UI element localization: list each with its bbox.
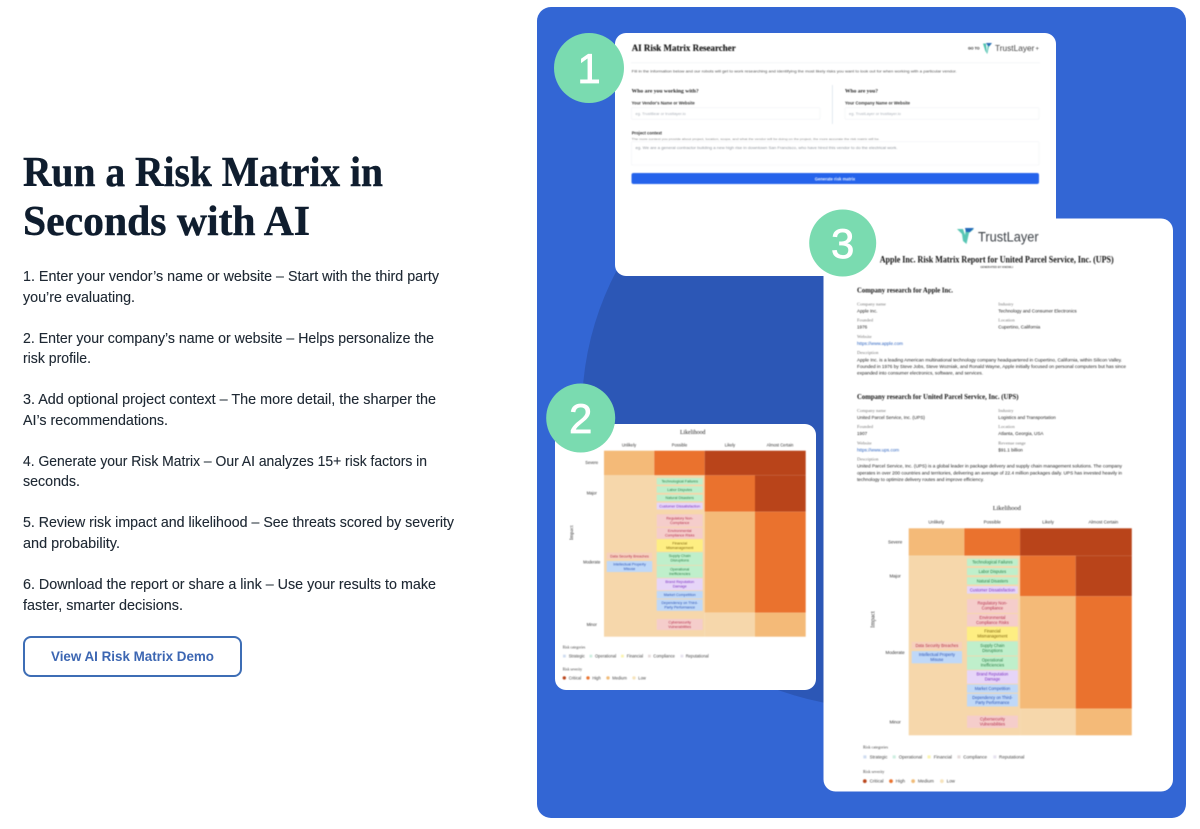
risk matrix small: Natural Disasters (666, 496, 694, 500)
risk matrix small: Major (587, 491, 597, 496)
risk matrix small: Severe (585, 460, 599, 465)
risk matrix large: Brand Reputation (977, 672, 1009, 677)
risk matrix small: Cybersecurity (668, 621, 691, 625)
company research: Apple: Website (857, 334, 872, 339)
risk matrix large: Impact (870, 611, 876, 628)
risk matrix small: Risk severity (563, 668, 582, 672)
risk matrix large: Medium (918, 779, 934, 784)
risk matrix large: Possible (984, 519, 1001, 524)
risk matrix large: Cybersecurity (980, 717, 1006, 722)
risk matrix small: Critical (569, 675, 581, 680)
company research: Apple (857, 287, 1127, 376)
report logo: TrustLayer (957, 228, 1039, 244)
risk matrix large: Compliance Risks (976, 620, 1009, 625)
company research: Apple: Cupertino, California (998, 325, 1041, 330)
risk matrix small: Impact (569, 525, 575, 540)
company research: UPS: Industry (998, 408, 1014, 413)
generate button: Generate risk matrix (815, 176, 856, 181)
panel: blue background (537, 7, 1186, 818)
project context field: Project context (632, 130, 663, 136)
risk matrix small: Operational (670, 567, 689, 571)
risk matrix large: Financial (934, 754, 952, 759)
company field: Your Company Name or Website (845, 100, 911, 106)
risk matrix large (863, 505, 1132, 784)
steps text block (23, 269, 455, 614)
company research: UPS: Atlanta, Georgia, USA (998, 431, 1044, 436)
risk matrix large: Disruptions (982, 648, 1003, 653)
company research: UPS: 1907 (857, 431, 868, 436)
steps text block: 3. Add optional project context – The more detail, the sharper the (23, 392, 436, 408)
company research: Apple: Founded (857, 318, 874, 322)
risk matrix large: Compliance (982, 606, 1004, 611)
company research: Apple: Founded in 1976 by Steve Jobs, Steve Wozniak, and Ronald Wayne, Apple initially focused on personal computers but has since (857, 364, 1127, 369)
company research: UPS: Logistics and Transportation (998, 415, 1056, 420)
company research: Apple: Apple Inc. (857, 308, 877, 314)
form logo: TrustLayer: TrustLayer (995, 43, 1035, 53)
risk matrix small: Low (638, 675, 646, 680)
company research: Apple: Technology and Consumer Electronics (998, 308, 1077, 314)
vendor field: Your Vendor's Name or Website (632, 100, 695, 106)
risk matrix small: Minor (587, 622, 597, 627)
project context field (632, 130, 1039, 165)
company research: UPS: United Parcel Service, Inc. (UPS) (857, 415, 925, 420)
risk matrix large: Moderate (886, 650, 905, 655)
company research: UPS: $91.1 billion (998, 447, 1023, 452)
risk matrix small: Possible (672, 442, 688, 447)
risk matrix large: Strategic (870, 754, 888, 759)
report title: Apple Inc. Risk Matrix Report for United Parcel Service, Inc. (UPS) (880, 254, 1114, 266)
risk matrix small: Market Competition (664, 593, 696, 597)
risk matrix large: Financial (984, 628, 1001, 633)
badge: step 1 (554, 33, 624, 103)
company research: UPS: United Parcel Service, Inc. (UPS) is a global leader in package delivery and supply chain management solutions. The company (857, 464, 1123, 469)
form intro text: Fill in the information below and our robots will get to work researching and identifying the most likely risks you want to look out for when working with a particular vendor. (632, 68, 957, 74)
title (23, 150, 383, 245)
risk matrix large: Likelihood (993, 505, 1022, 512)
company field: Who are you? (845, 89, 878, 95)
title: Seconds with AI (23, 199, 310, 245)
panel: step 2 matrix card (555, 424, 816, 690)
badge: step 3 (809, 210, 876, 276)
risk matrix large: Critical (870, 779, 883, 784)
risk matrix small: Disruptions (670, 559, 689, 563)
risk matrix large: Risk categories (863, 745, 888, 750)
form logo: TrustLayer (968, 43, 1040, 54)
risk matrix large: Natural Disasters (977, 578, 1008, 583)
risk matrix small: Mismanagement (666, 546, 693, 550)
vendor field (632, 89, 820, 119)
form logo: TrustLayer: GO TO (968, 46, 980, 50)
risk matrix small: Unlikely (622, 442, 637, 447)
risk matrix small: Environmental (668, 529, 692, 533)
company research: Apple: Location (998, 318, 1015, 322)
risk matrix small: Inefficiencies (669, 572, 690, 576)
company research: UPS: Description (857, 456, 879, 462)
panel: step 1 form card (615, 33, 1056, 276)
risk matrix small: Almost Certain (767, 442, 794, 447)
badge: step 3: 3 (831, 220, 854, 267)
risk matrix large: Severe (888, 539, 903, 544)
risk matrix small: Party Performance (664, 605, 695, 609)
risk matrix small: Regulatory Non- (666, 516, 694, 520)
steps text block: AI’s recommendations. (23, 413, 168, 429)
risk matrix small: High (592, 675, 601, 680)
risk matrix large: Compliance (963, 754, 988, 759)
risk matrix small: Financial (627, 654, 643, 659)
risk matrix small: Data Security Breaches (610, 554, 649, 558)
company research: UPS: Website (857, 440, 872, 445)
report title: GENERATED BY KNOWLI (980, 265, 1013, 269)
risk matrix large: Mismanagement (977, 633, 1008, 638)
risk matrix small: Operational (595, 654, 616, 659)
risk matrix large: Inefficiencies (981, 663, 1004, 668)
company research: Apple: Description (857, 350, 879, 355)
risk matrix small: Technological Failures (661, 480, 698, 484)
project context field: eg. We are a general contractor building a new high rise in downtown San Francisco, who have hired this vendor to do the electrical work. (636, 145, 898, 150)
company research: UPS: technology to optimize delivery routes and improve efficiency. (857, 477, 984, 482)
risk matrix small (563, 430, 806, 680)
form logo: TrustLayer: + (1036, 46, 1040, 52)
risk matrix small: Supply Chain (669, 554, 691, 558)
company research: Apple: 1976 (857, 325, 868, 330)
vendor field: eg. TrustBear or trustlayer.io (636, 111, 687, 116)
report logo: TrustLayer: TrustLayer (978, 230, 1039, 244)
steps text block: and probability. (23, 536, 120, 552)
risk matrix large: Reputational (999, 754, 1024, 759)
risk matrix large: Almost Certain (1089, 519, 1119, 524)
form title: AI Risk Matrix Researcher (632, 43, 736, 53)
risk matrix large: Likely (1042, 519, 1055, 524)
risk matrix large: Data Security Breaches (915, 643, 958, 648)
steps text block: seconds. (23, 474, 80, 490)
risk matrix large: Low (947, 779, 956, 784)
project context field: The more context you provide about project, location, scope, and what the vendor will be doing on the project, the more accurate the risk matrix will be. (632, 137, 880, 141)
risk matrix small: Labor Disputes (667, 488, 692, 492)
company research: UPS: Company research for United Parcel Service, Inc. (UPS) (857, 394, 1018, 401)
title: Run a Risk Matrix in (23, 150, 383, 196)
steps text block: 6. Download the report or share a link – Use your results to make (23, 577, 436, 593)
report title (880, 254, 1114, 269)
risk matrix large: Dependency on Third- (972, 695, 1013, 700)
risk matrix small: Reputational (686, 654, 709, 659)
risk matrix small: Financial (672, 541, 687, 545)
risk matrix large: Intellectual Property (919, 652, 956, 657)
risk matrix small: Compliance Risks (665, 534, 695, 538)
risk matrix small: Medium (612, 675, 627, 680)
risk matrix small: Customer Dissatisfaction (659, 504, 700, 508)
risk matrix small: Vulnerabilities (668, 625, 691, 629)
risk matrix large: Market Competition (975, 686, 1011, 691)
risk matrix large: Risk severity (863, 769, 885, 774)
risk matrix large: Regulatory Non- (978, 601, 1008, 606)
risk matrix small: Moderate (583, 560, 601, 565)
company research: UPS: Founded (857, 424, 874, 429)
company research: Apple: Company name (857, 302, 886, 306)
risk matrix small: Intellectual Property (613, 563, 646, 567)
risk matrix large: Environmental (979, 615, 1006, 620)
risk matrix small: Strategic (569, 654, 585, 659)
badge: step 2 (546, 384, 615, 452)
risk matrix small: Likelihood (680, 430, 706, 436)
steps text block: 2. Enter your company’s name or website – Helps personalize the (23, 331, 434, 347)
company research: UPS (857, 394, 1123, 482)
risk matrix large: High (896, 779, 906, 784)
risk matrix large: Supply Chain (980, 643, 1005, 648)
risk matrix large: Minor (889, 720, 901, 725)
risk matrix large: Unlikely (928, 519, 945, 524)
risk matrix small: Compliance (670, 521, 689, 525)
risk matrix large: Major (889, 573, 901, 578)
company research: UPS: Location (998, 424, 1015, 429)
risk matrix small: Damage (673, 585, 687, 589)
badge: step 1: 1 (577, 45, 601, 92)
company research: UPS: Revenue range (998, 440, 1026, 445)
risk matrix large: Damage (985, 677, 1001, 682)
company field: eg. TrustLayer or trustlayer.io (849, 111, 902, 116)
steps text block: you’re evaluating. (23, 290, 135, 306)
steps text block: risk profile. (23, 351, 91, 367)
risk matrix small: Compliance (653, 654, 676, 659)
risk matrix large: Operational (899, 754, 922, 759)
company research: Apple: https://www.apple.com (857, 341, 903, 346)
risk matrix large: Party Performance (975, 700, 1010, 705)
company research: Apple: Industry (998, 302, 1014, 306)
risk matrix large: Vulnerabilities (980, 722, 1005, 727)
darker blue circle (583, 271, 824, 702)
company research: UPS: https://www.ups.com (857, 447, 899, 452)
risk matrix large: Operational (982, 658, 1003, 663)
risk matrix small: Dependency on Third- (661, 601, 699, 605)
risk matrix large: Misuse (930, 657, 944, 662)
risk matrix large: Technological Failures (972, 560, 1013, 565)
steps text block: faster, smarter decisions. (23, 598, 183, 614)
risk matrix small: Brand Reputation (665, 580, 694, 584)
button: view demo (24, 637, 241, 676)
company research: Apple: Company research for Apple Inc. (857, 287, 953, 294)
risk matrix small: Risk categories (563, 646, 586, 650)
button: view demo: View AI Risk Matrix Demo (51, 648, 214, 664)
badge: step 2: 2 (569, 395, 592, 442)
company research: Apple: expanded into consumer electronics, software, and services. (857, 371, 983, 376)
risk matrix small: Misuse (624, 567, 635, 571)
risk matrix large: Customer Dissatisfaction (970, 587, 1016, 592)
risk matrix small: Likely (725, 442, 736, 447)
generate button (632, 173, 1039, 184)
company field (845, 89, 1039, 119)
company research: Apple: Apple Inc. is a leading American multinational technology company headquartered in Cupertino, California, within Silicon Valley. (857, 358, 1122, 362)
steps text block: 4. Generate your Risk Matrix – Our AI analyzes 15+ risk factors in (23, 454, 427, 470)
panel: step 3 report card (824, 218, 1173, 792)
steps text block: 5. Review risk impact and likelihood – See threats scored by severity (23, 515, 455, 531)
steps text block: 1. Enter your vendor’s name or website – Start with the third party (23, 269, 440, 285)
risk matrix large: Labor Disputes (979, 569, 1006, 574)
company research: UPS: Company name (857, 408, 886, 413)
company research: UPS: operates in over 200 countries and territories, delivering an average of 22.4 million packages daily. UPS has invested heavily in (857, 470, 1123, 475)
vendor field: Who are you working with? (632, 89, 699, 95)
